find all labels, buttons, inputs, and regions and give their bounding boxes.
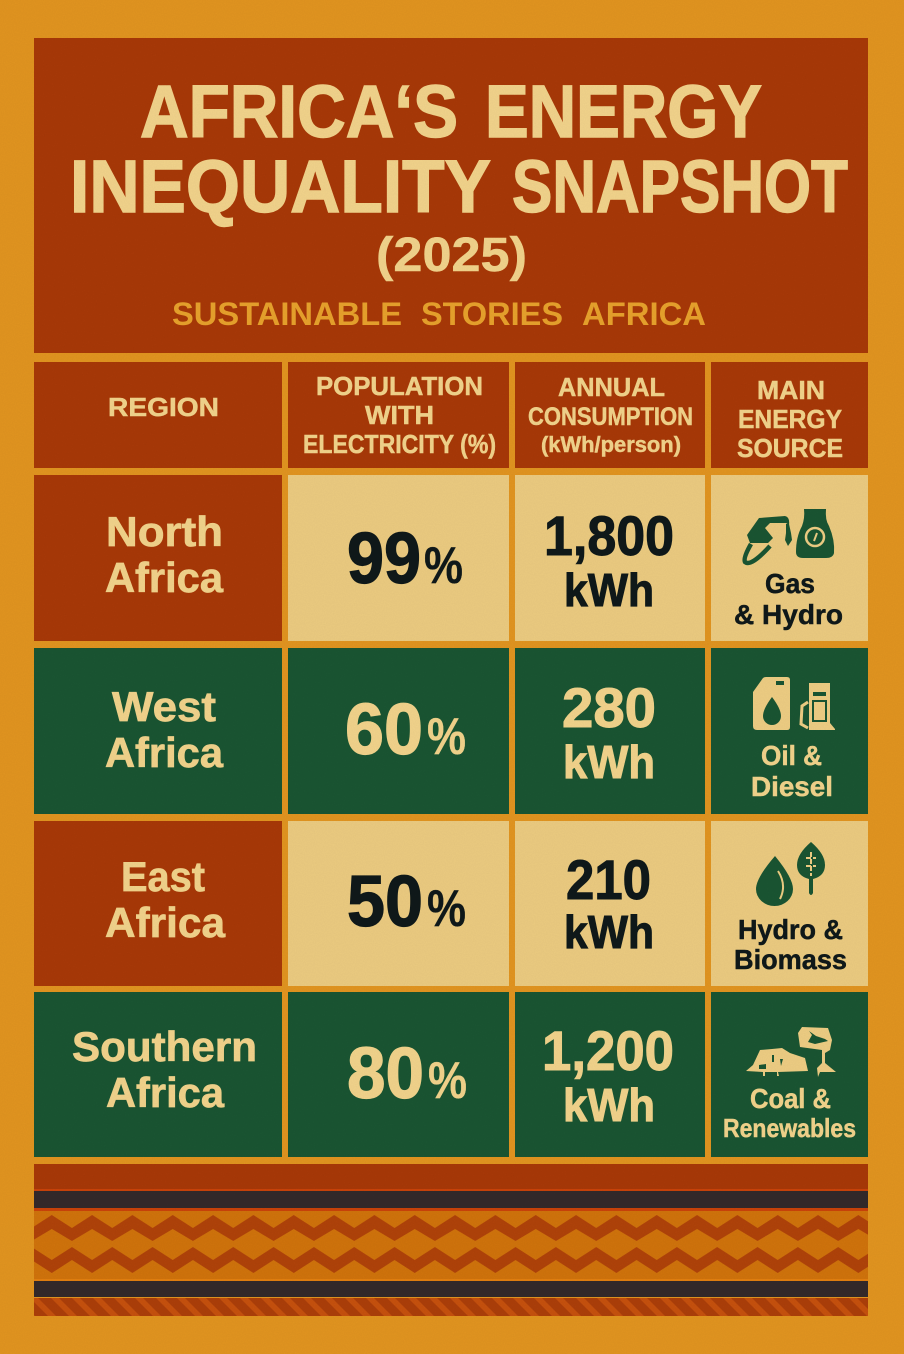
consumption cell: 1,200 kWh: kWh [563,1079,655,1131]
consumption cell: 280 kWh: 280 [562,676,656,739]
electricity cell: 99%: % [424,537,463,595]
source cell: gas and hydro: Gas [765,568,815,599]
electricity cell: 50%: % [427,880,466,938]
source cell: hydro and biomass: Hydro & [738,914,843,945]
consumption cell: 210 kWh: kWh [564,906,654,958]
consumption cell: 1,200 kWh [515,992,705,1157]
region cell: East Africa: East [121,853,205,900]
source cell: coal and renewables: Renewables [723,1113,856,1143]
panel: title banner [34,38,868,353]
row: East Africa [34,821,868,986]
electricity cell: 50% [288,821,509,986]
header: main energy source: SOURCE [737,433,843,463]
region cell: North Africa [34,475,282,641]
source cell: gas and hydro [711,475,868,641]
electricity cell: 60%: 60 [345,690,423,770]
icon: water drop [756,856,793,906]
source cell: coal and renewables: Coal & [750,1083,831,1114]
header: population with electricity: POPULATION [316,371,483,401]
source cell: hydro and biomass [711,821,868,986]
consumption cell: 1,800 kWh: 1,800 [544,504,674,567]
consumption cell: 280 kWh: kWh [563,736,655,788]
header: annual consumption: ANNUAL [558,372,665,402]
icon: coal heap [746,1048,808,1076]
header: population with electricity: WITH [365,400,434,430]
organisation name: AFRICA [582,296,706,332]
region cell: North Africa: North [106,508,223,555]
header: annual consumption: CONSUMPTION [528,403,693,431]
header: main energy source: ENERGY [738,404,842,434]
header: main energy source: MAIN [757,375,825,405]
header: region: REGION [108,392,219,422]
electricity cell: 99%: 99 [347,519,421,599]
region cell: North Africa: Africa [105,554,224,601]
row: West Africa [34,648,868,814]
region cell: Southern Africa: Southern [72,1023,257,1070]
consumption cell: 210 kWh: 210 [566,848,651,911]
region cell: West Africa: West [112,683,216,730]
title: INEQUALITY [70,145,491,228]
header: annual consumption [515,362,705,468]
icon: renewables blob [798,1027,836,1077]
icon: fuel nozzle [745,516,792,563]
title [70,70,848,228]
electricity cell: 80%: % [428,1052,467,1110]
consumption cell: 1,200 kWh: 1,200 [542,1019,674,1082]
header: population with electricity: ELECTRICITY (%) [303,429,496,459]
row: Southern Africa [34,992,868,1157]
region cell: Southern Africa: Africa [106,1069,225,1116]
consumption cell: 280 kWh [515,648,705,814]
organisation name: SUSTAINABLE [172,296,402,332]
organisation name [172,296,706,332]
icon: fuel pump [801,683,835,730]
consumption cell: 1,800 kWh [515,475,705,641]
header: region [34,362,282,468]
source cell: gas and hydro: & Hydro [734,599,843,630]
source cell: hydro and biomass: Biomass [734,944,847,975]
row: North Africa [34,475,868,641]
electricity cell: 60% [288,648,509,814]
region cell: Southern Africa [34,992,282,1157]
source cell: oil and diesel: Diesel [751,771,833,802]
electricity cell: 80% [288,992,509,1157]
header: annual consumption: (kWh/person) [541,432,681,457]
source cell: oil and diesel: Oil & [761,740,822,771]
table header row [34,362,868,468]
region cell: West Africa [34,648,282,814]
region cell: East Africa: Africa [105,899,226,946]
decorative footer band [34,1164,868,1316]
header: main energy source [711,362,868,468]
title: AFRICA‘S [140,70,458,153]
organisation name: STORIES [421,296,563,332]
source cell: oil and diesel [711,648,868,814]
year subtitle: (2025) [376,229,527,282]
electricity cell: 50%: 50 [347,862,423,942]
title: ENERGY [485,70,762,153]
source cell: coal and renewables [711,992,868,1157]
consumption cell: 210 kWh [515,821,705,986]
icon: oil canister [753,677,790,730]
region cell: West Africa: Africa [105,729,224,776]
header: population with electricity [288,362,509,468]
region cell: East Africa [34,821,282,986]
consumption cell: 1,800 kWh: kWh [564,564,654,616]
electricity cell: 60%: % [427,708,466,766]
electricity cell: 99% [288,475,509,641]
icon: fuel bottle [796,509,834,558]
electricity cell: 80%: 80 [347,1034,424,1114]
icon: leaf [797,842,825,895]
